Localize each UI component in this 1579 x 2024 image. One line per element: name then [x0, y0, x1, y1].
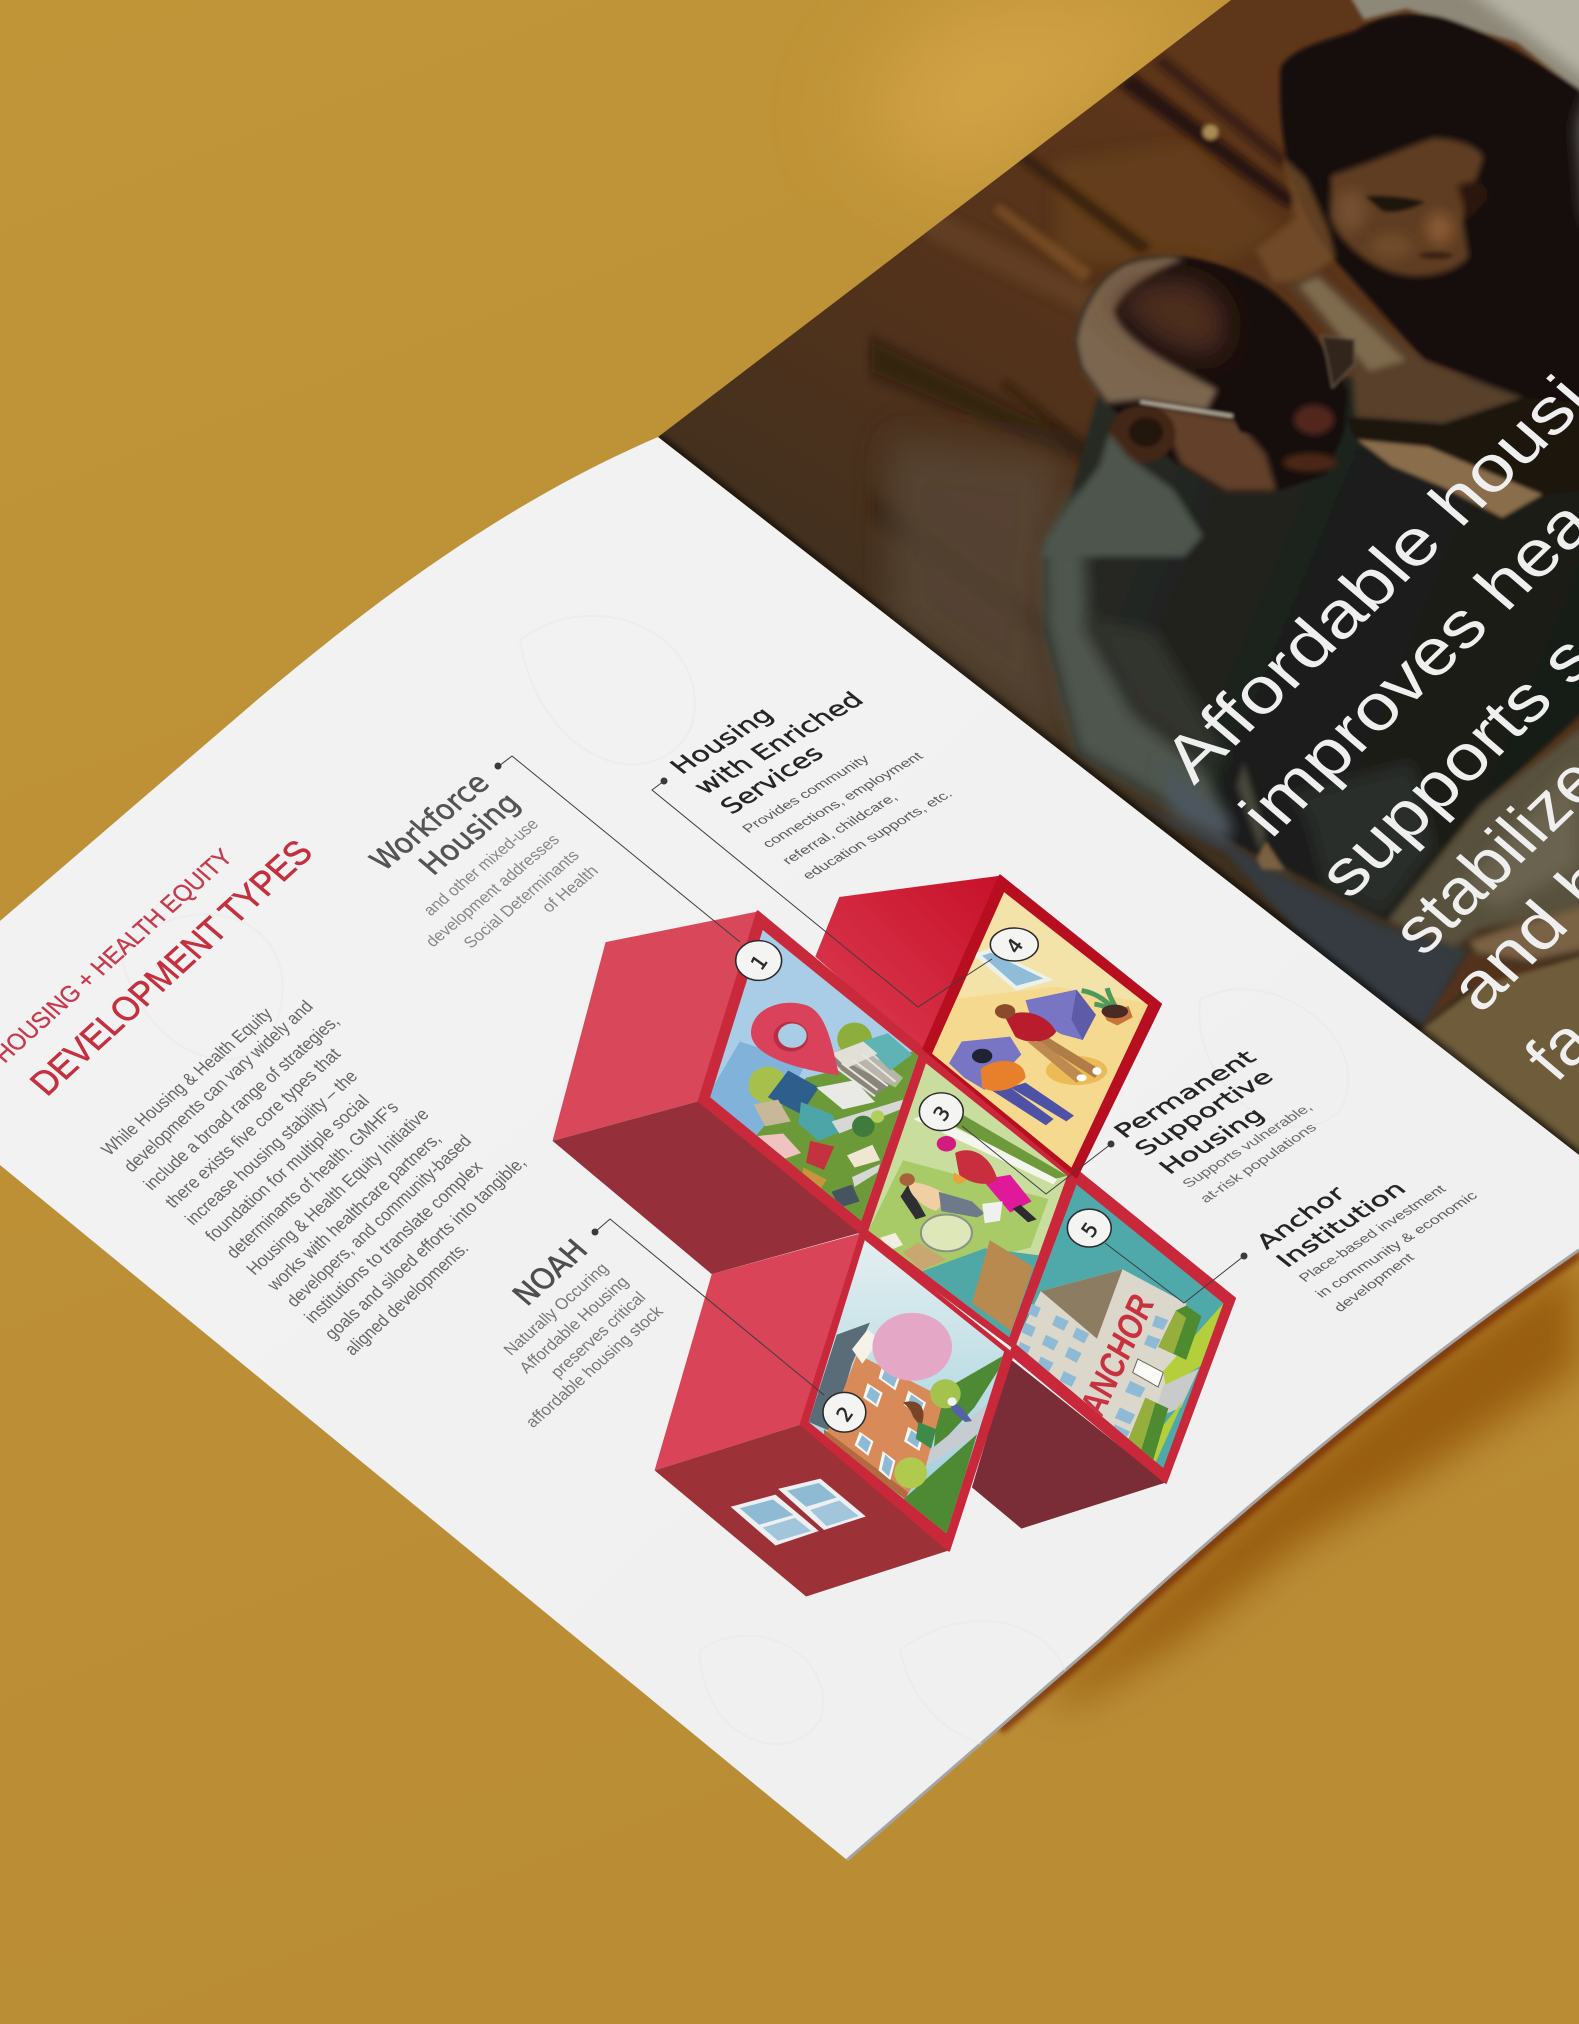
panel 4: housing with enriched services scene: [929, 889, 1158, 1175]
panel 5: anchor institution scene: [1010, 1180, 1230, 1470]
label: NOAH: Affordable Housing: [515, 1273, 632, 1377]
badge 5: [1067, 1209, 1111, 1247]
badge 3: [919, 1093, 963, 1131]
photo: lap at lower right: [1420, 955, 1579, 1154]
label: anchor institution: development: [1330, 1250, 1417, 1315]
body paragraph: aligned developments.: [340, 1238, 473, 1359]
cube 1 walls: [553, 912, 860, 1274]
label: permanent supportive housing: Housing: [1154, 1104, 1271, 1179]
leader lines: [499, 756, 1244, 1395]
photo: pale wall at upper right: [1350, 0, 1579, 93]
photo: wall beside shirt: [889, 439, 1078, 753]
body paragraph: goals and siloed efforts into tangible,: [320, 1152, 530, 1343]
body paragraph: institutions to translate complex: [300, 1157, 487, 1327]
badge 2: 2: [832, 1402, 858, 1426]
label: permanent supportive housing: Supports vulnerable,: [1178, 1100, 1316, 1190]
label: workforce housing: and other mixed-use: [419, 815, 542, 919]
body paragraph: increase housing stability – the: [180, 1066, 362, 1228]
text group: left column: [0, 767, 667, 1431]
label: housing with enriched services: [664, 687, 956, 882]
photo: soft vignette at right edge: [1576, 21, 1579, 271]
body paragraph: Housing & Health Equity Initiative: [242, 1104, 433, 1278]
label: NOAH: affordable housing stock: [522, 1302, 667, 1431]
number badges: [736, 928, 1111, 1432]
cube 5 wall: [972, 1359, 1166, 1529]
panel 2: NOAH scene: [806, 1238, 1010, 1538]
label: workforce housing: Social Determinants: [460, 847, 583, 952]
label: housing with enriched services: with Enriched: [687, 687, 870, 799]
body paragraph: there exists five core types that: [160, 1044, 345, 1211]
label: housing with enriched services: Services: [714, 741, 830, 819]
badge 4: [990, 928, 1038, 961]
body paragraph: works with healthcare partners,: [262, 1129, 445, 1295]
seated figure: [972, 1049, 1074, 1125]
label: workforce housing: development addresses: [422, 831, 563, 950]
wheelchair user: [899, 1173, 1003, 1251]
photo: woman blouse folds: [1288, 271, 1579, 495]
cube 4 wall: [815, 876, 1000, 1054]
cube 2 walls: [655, 1233, 949, 1596]
right page: photograph: [650, 0, 1579, 1174]
badge 4: 4: [1002, 934, 1028, 958]
label: anchor institution: [1251, 1178, 1481, 1315]
photo: wood wall detail: [993, 55, 1295, 464]
building window grid: [837, 1055, 895, 1096]
shadow beneath brochure: [1000, 1254, 1579, 1730]
label: workforce housing: of Health: [538, 862, 602, 916]
label: NOAH: [500, 1234, 667, 1431]
blossom tree: [872, 1313, 952, 1381]
label: permanent supportive housing: at-risk populations: [1196, 1120, 1320, 1205]
photo: hands: [1428, 906, 1579, 1020]
label: housing with enriched services: education supports, etc.: [798, 787, 956, 882]
sign text ANCHOR: ANCHOR: [1073, 1286, 1162, 1424]
label: anchor institution: in community & economic: [1311, 1189, 1481, 1300]
label: anchor institution: Anchor: [1251, 1182, 1352, 1254]
building windows: [1016, 1303, 1168, 1440]
photo: shading along spine: [658, 437, 1579, 1155]
label: housing with enriched services: connections, employment: [758, 749, 926, 850]
left page: paper sheet: [0, 437, 1579, 1860]
label: permanent supportive housing: [1109, 1047, 1320, 1205]
label: workforce housing: Housing: [412, 787, 528, 882]
photo: woman dark top and hair: [1280, 14, 1579, 407]
badge 3: 3: [929, 1102, 955, 1126]
lit area at top of surface: [850, 0, 1231, 200]
photo: woman neck hair: [1255, 157, 1336, 282]
standing caregiver: [937, 1136, 1037, 1222]
body paragraph: foundation for multiple social: [200, 1091, 373, 1245]
photo headline: Affordable housi: [1148, 363, 1579, 796]
label: NOAH: Naturally Occuring: [500, 1259, 612, 1359]
photo: khaki shirt: [1388, 708, 1579, 947]
badge 2: [823, 1392, 866, 1432]
label: workforce housing: Workforce: [363, 767, 497, 877]
label: permanent supportive housing: Supportive: [1129, 1066, 1279, 1160]
paper page edge: [847, 1250, 1579, 1860]
badge 1: 1: [746, 951, 772, 974]
badge 5: 5: [1077, 1218, 1103, 1242]
badge 1: [736, 941, 782, 980]
panel 1: workforce housing scene: [704, 923, 923, 1228]
cube diagram: [553, 876, 1235, 1596]
main heading: DEVELOPMENT TYPES: [22, 833, 321, 1102]
label: housing with enriched services: referral, childcare,: [778, 790, 901, 867]
hedges: [1128, 1306, 1202, 1461]
label: housing with enriched services: Provides community: [738, 752, 872, 835]
location pin: [751, 1003, 839, 1075]
body paragraph: determinants of health. GMHF's: [221, 1097, 402, 1262]
photo: man head: [1074, 255, 1355, 491]
cube 2 windows: [731, 1479, 866, 1546]
label: anchor institution: Institution: [1271, 1178, 1412, 1272]
panel frames: [699, 876, 1235, 1550]
photo headline: improves hea: [1225, 487, 1579, 850]
photo: wall and far-left stripes: [867, 219, 1090, 536]
label: NOAH: NOAH: [506, 1234, 595, 1312]
body paragraph: While Housing & Health Equity: [96, 1003, 277, 1159]
photo: man shirt: [1044, 378, 1579, 920]
body paragraph: developers, and community-based: [282, 1131, 475, 1311]
leader dots: [494, 762, 1248, 1260]
photo: hand patch near sleeve: [1257, 841, 1284, 869]
photo: light fabric near text: [1356, 439, 1543, 518]
body paragraph: developments can vary widely and: [119, 996, 317, 1176]
labels: permanent supportive housing and anchor institution: [1109, 1047, 1481, 1315]
label: anchor institution: Place-based investment: [1295, 1182, 1449, 1285]
body paragraph: [96, 996, 530, 1359]
standing figure: [995, 1004, 1102, 1081]
photo headline: [1148, 363, 1579, 1094]
photo: woman face: [1331, 137, 1488, 276]
label: permanent supportive housing: Permanent: [1109, 1047, 1262, 1143]
label: workforce housing: [363, 767, 602, 952]
building windows: [855, 1364, 926, 1480]
label: housing with enriched services: Housing: [664, 702, 780, 779]
body paragraph: include a broad range of strategies,: [139, 1011, 343, 1194]
panel 3: permanent supportive housing scene: [862, 1058, 1077, 1344]
photo: man sleeve: [1126, 761, 1467, 1027]
label: NOAH: preserves critical: [547, 1288, 650, 1381]
photo: man collar: [1041, 432, 1203, 557]
photo headline: supports s: [1303, 622, 1579, 911]
faint paper pattern: [978, 1668, 1066, 1744]
